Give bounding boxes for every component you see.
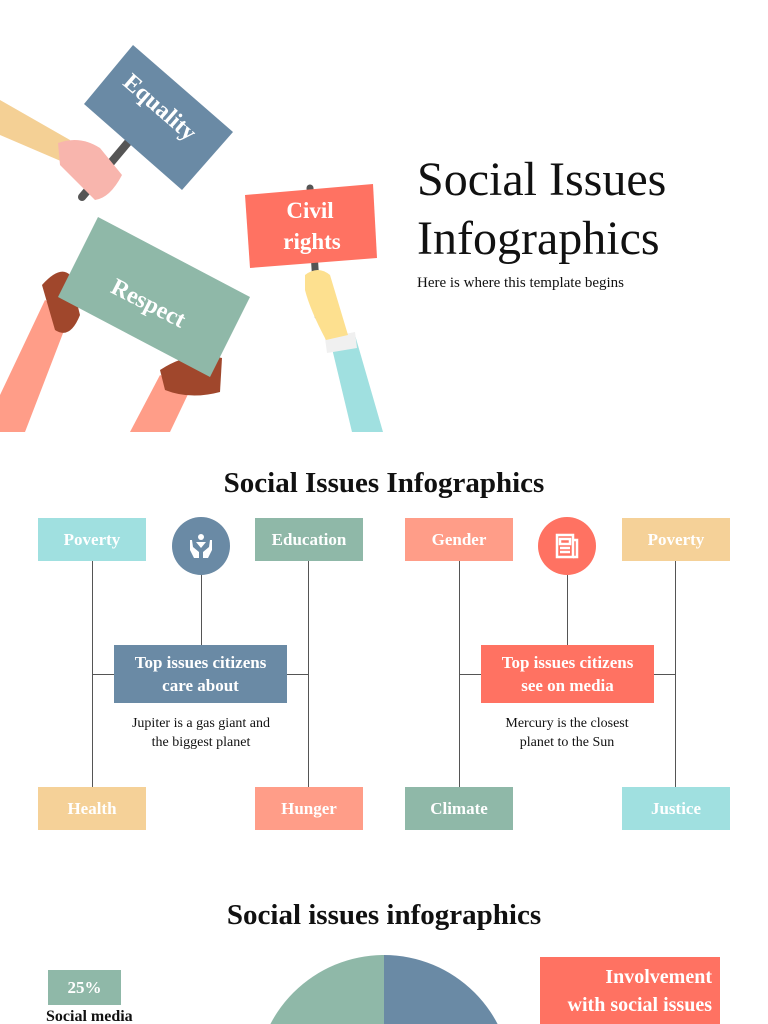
sign: Equality	[0, 45, 233, 200]
section heading 2: Social issues infographics	[227, 899, 541, 931]
sign: Respect	[0, 217, 250, 432]
box: Poverty: Poverty	[648, 530, 704, 548]
stat: 25% social media: 25%	[68, 978, 102, 996]
box: Health: Health	[67, 798, 117, 818]
main title	[417, 153, 666, 265]
pie chart	[270, 955, 498, 1024]
box: Justice	[622, 787, 730, 830]
sign: Civil rights: rights	[283, 229, 341, 254]
box: Health	[38, 787, 146, 830]
box: Poverty	[38, 518, 146, 561]
description	[505, 716, 629, 750]
description: Jupiter is a gas giant and	[132, 716, 270, 731]
box: Justice: Justice	[651, 798, 701, 818]
callout box: Top issues citizens	[135, 653, 266, 672]
box: Poverty	[622, 518, 730, 561]
box: Gender	[405, 518, 513, 561]
diagram: top issues citizens see on media	[405, 517, 730, 830]
description: Mercury is the closest	[505, 716, 629, 731]
box: Hunger	[255, 787, 363, 830]
box: Poverty: Poverty	[64, 530, 120, 548]
main title: Social Issues	[417, 153, 666, 206]
callout box: see on media	[521, 676, 614, 695]
sign: Equality: Equality	[118, 69, 201, 146]
sign: Respect: Respect	[107, 274, 190, 334]
callout box: Top issues citizens	[502, 653, 633, 672]
icon: newspaper	[538, 517, 596, 575]
main title: Infographics	[417, 212, 660, 265]
callout: involvement: Involvement	[605, 966, 712, 988]
box: Gender: Gender	[432, 530, 486, 548]
diagram: top issues citizens care about	[38, 517, 363, 830]
box: Education: Education	[272, 530, 346, 548]
stat: 25% social media	[46, 970, 133, 1024]
callout: involvement	[540, 957, 720, 1024]
description: the biggest planet	[152, 735, 250, 750]
description	[132, 716, 270, 750]
box: Climate: Climate	[430, 798, 488, 818]
description: planet to the Sun	[520, 735, 614, 750]
subtitle: Here is where this template begins	[417, 275, 624, 291]
box: Hunger: Hunger	[281, 798, 337, 818]
callout: involvement: with social issues	[568, 994, 712, 1016]
illustration: hands with signs	[0, 45, 383, 432]
callout box	[114, 645, 287, 703]
icon: hands care	[172, 517, 230, 575]
box: Education	[255, 518, 363, 561]
callout box	[481, 645, 654, 703]
sign: Civil rights	[245, 184, 383, 432]
section heading: Social Issues Infographics	[224, 467, 544, 499]
sign: Civil rights: Civil	[286, 198, 334, 223]
callout box: care about	[162, 676, 239, 695]
box: Climate	[405, 787, 513, 830]
